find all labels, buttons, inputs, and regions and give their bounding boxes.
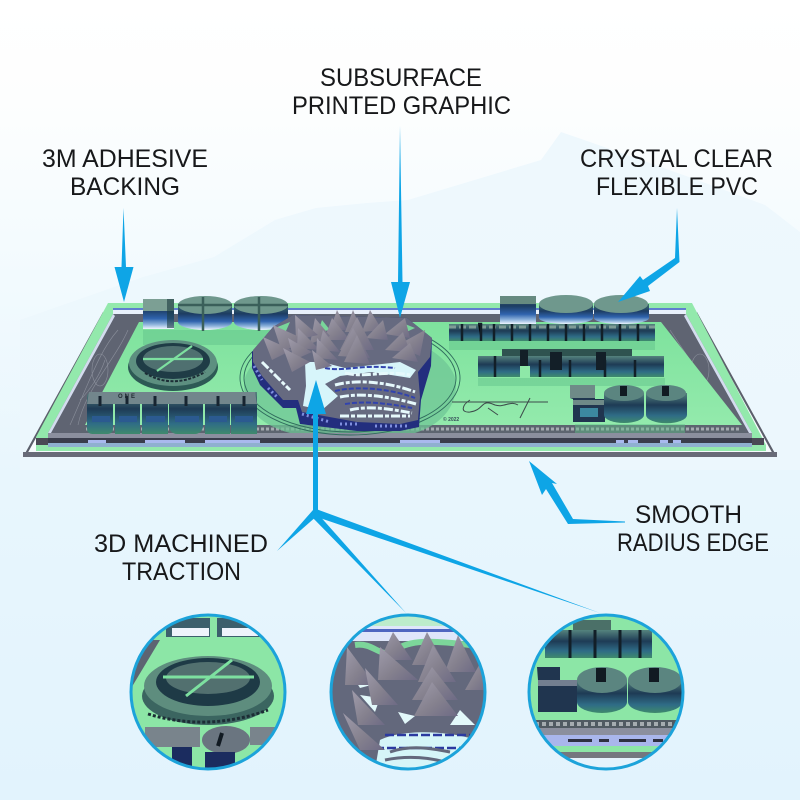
arrow: smooth radius edge	[529, 461, 625, 524]
blue rear strip	[113, 308, 686, 314]
small copyright mark: © 2022	[443, 416, 459, 423]
outer radius edge	[23, 312, 777, 457]
label: smooth radius edge: SMOOTH	[635, 501, 742, 529]
signature	[452, 398, 548, 418]
engraved portrait ring	[244, 329, 456, 433]
label: 3M adhesive backing	[42, 145, 208, 201]
arrow: adhesive backing	[114, 208, 134, 302]
label: 3D machined traction	[94, 530, 268, 586]
label: crystal clear flexible PVC: FLEXIBLE PVC	[596, 173, 758, 201]
raised numerals top left	[143, 296, 288, 331]
label: 3M adhesive backing: BACKING	[70, 173, 180, 201]
arrow: subsurface graphic	[391, 126, 410, 318]
label: smooth radius edge: RADIUS EDGE	[617, 529, 769, 557]
green clear layer	[36, 303, 766, 451]
arrow: 3D machined traction branches	[277, 380, 600, 613]
raised numerals top right	[500, 295, 649, 324]
detail circle: raised numerals	[528, 614, 686, 772]
label: crystal clear flexible PVC	[580, 145, 773, 201]
relief top face	[253, 315, 432, 424]
label: 3D machined traction: 3D MACHINED	[94, 530, 268, 558]
skull relief with spikes	[252, 310, 432, 431]
grey printed border	[48, 314, 752, 433]
label: crystal clear flexible PVC: CRYSTAL CLEAR	[580, 145, 773, 173]
green note face	[85, 322, 742, 425]
arrow: crystal clear PVC	[618, 208, 680, 302]
raised numerals bottom right	[570, 385, 687, 423]
label: subsurface printed graphic	[292, 64, 511, 120]
face highlights	[303, 362, 416, 410]
raised word bottom left	[87, 392, 257, 434]
panel: clear PVC bill	[23, 295, 777, 457]
front edge band	[48, 433, 752, 438]
raised line of lettering two	[478, 349, 664, 378]
guilloche patterns	[70, 330, 735, 425]
label: 3D machined traction: TRACTION	[122, 558, 241, 586]
label: 3M adhesive backing: 3M ADHESIVE	[42, 145, 208, 173]
spikes	[263, 310, 425, 372]
border microprint	[80, 425, 746, 433]
detail circle: medallion	[130, 614, 286, 770]
block reflections	[143, 330, 685, 433]
medallion seal	[128, 340, 218, 391]
label: smooth radius edge	[617, 501, 769, 557]
label: subsurface printed graphic: PRINTED GRAPHIC	[292, 92, 511, 120]
detail circle: spikes	[329, 614, 490, 772]
label: subsurface printed graphic: SUBSURFACE	[320, 64, 482, 92]
mountain silhouette	[20, 132, 800, 470]
relief side wall	[252, 315, 432, 431]
raised line of lettering one	[449, 324, 655, 341]
raised word bottom left: ONE	[118, 394, 137, 400]
